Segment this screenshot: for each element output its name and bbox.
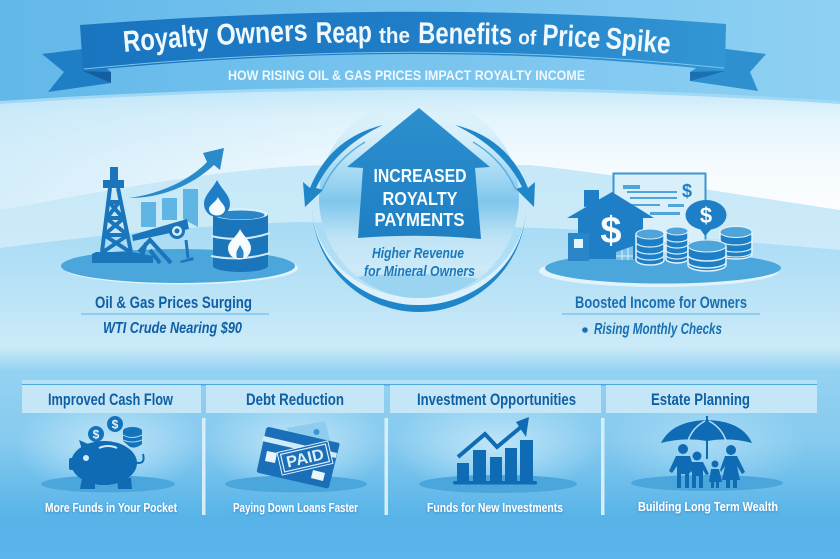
panel: increased royalty payments — [303, 98, 535, 312]
right circular arrow — [455, 125, 535, 207]
circle caption: for Mineral Owners — [364, 264, 475, 280]
divider — [601, 418, 604, 515]
divider — [202, 418, 206, 515]
panel: estate planning — [606, 385, 817, 514]
heading: Oil & Gas Prices Surging — [95, 293, 252, 312]
right ribbon tail — [690, 49, 766, 91]
coin stacks — [636, 226, 752, 271]
shadow — [41, 476, 175, 492]
platform ellipse — [539, 255, 779, 287]
panel: debt reduction — [204, 385, 388, 515]
ribbon body — [80, 12, 726, 71]
left circular arrow — [303, 125, 383, 207]
panel: oil and gas prices — [61, 148, 298, 337]
label: Building Long Term Wealth — [638, 500, 778, 514]
bottom strip — [22, 380, 817, 386]
icon: piggy bank — [69, 440, 144, 489]
left ribbon tail — [42, 49, 111, 92]
icon: paid card: PAID — [285, 446, 326, 472]
subtitle: HOW RISING OIL & GAS PRICES IMPACT ROYALTY INCOME — [228, 68, 585, 83]
icon: coins — [88, 416, 142, 448]
icon: family under umbrella — [661, 416, 752, 488]
house: $ — [600, 210, 622, 252]
shadow — [225, 476, 367, 492]
title: Royalty — [122, 19, 211, 59]
title: Spike — [604, 22, 672, 61]
icon: coins: $ — [93, 428, 100, 442]
dollar bubble — [686, 200, 726, 236]
title — [122, 14, 672, 61]
circle caption — [364, 246, 475, 280]
arrow text: ROYALTY — [382, 189, 458, 209]
title: Reap — [316, 16, 372, 50]
oil derrick — [92, 167, 153, 263]
subheading: Rising Monthly Checks — [594, 321, 722, 338]
heading: Debt Reduction — [246, 390, 344, 409]
house — [567, 190, 654, 261]
up arrow — [347, 108, 490, 239]
circle caption: Higher Revenue — [372, 246, 464, 262]
panel: investment opportunities — [390, 385, 601, 515]
circle — [312, 120, 526, 312]
panel: boosted income — [539, 174, 781, 338]
label: More Funds in Your Pocket — [45, 501, 178, 515]
platform ellipse — [64, 252, 298, 284]
title: of — [518, 27, 537, 50]
rising bars — [141, 189, 198, 227]
heading: Estate Planning — [651, 390, 750, 409]
title: Owners — [216, 14, 308, 52]
title: Price — [542, 19, 601, 55]
panel: improved cash flow — [15, 385, 205, 515]
icon: growth chart — [453, 417, 537, 484]
check document: $ — [682, 181, 692, 201]
heading: Boosted Income for Owners — [575, 293, 747, 312]
heading: Investment Opportunities — [417, 390, 576, 409]
arrow text: INCREASED — [374, 166, 466, 186]
rising arrow — [129, 148, 224, 198]
oil drop — [204, 180, 230, 217]
icon: coins: $ — [112, 418, 119, 432]
barrel — [211, 208, 270, 272]
pump jack — [132, 219, 194, 263]
heading: Improved Cash Flow — [48, 390, 174, 409]
label: Paying Down Loans Faster — [233, 501, 358, 515]
icon: paid card — [257, 421, 340, 488]
banner ribbon — [42, 12, 766, 92]
shadow — [631, 475, 783, 491]
check document — [614, 174, 706, 244]
title: the — [379, 23, 410, 48]
title: Benefits — [418, 17, 512, 52]
shadow — [419, 475, 577, 493]
arrow text — [374, 166, 466, 230]
dollar bubble: $ — [700, 203, 712, 228]
divider — [384, 418, 388, 515]
subheading: WTI Crude Nearing $90 — [103, 320, 242, 337]
bullet — [582, 327, 588, 333]
label: Funds for New Investments — [427, 501, 563, 515]
arrow text: PAYMENTS — [374, 210, 464, 230]
